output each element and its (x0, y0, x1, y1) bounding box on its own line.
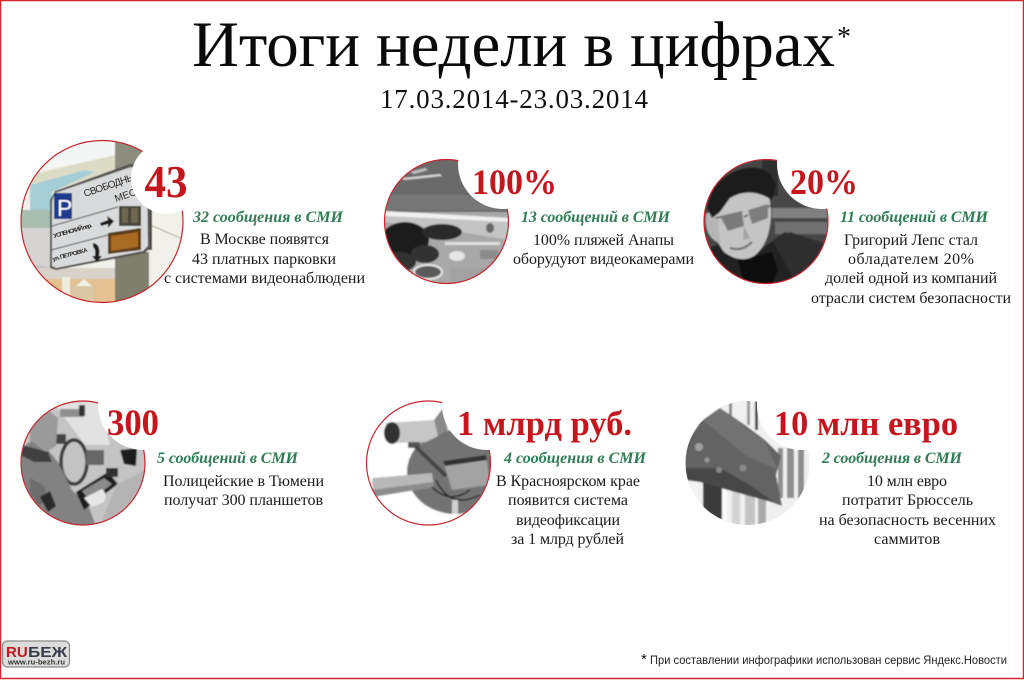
mentions count: 13 сообщений в СМИ (521, 209, 671, 226)
mentions count: 11 сообщений в СМИ (840, 209, 989, 226)
mentions count: 32 сообщения в СМИ (192, 209, 344, 226)
photo: parking sign (20, 140, 188, 308)
description: В Москве появятся (200, 231, 330, 248)
panel: Leps (703, 158, 1011, 306)
logo: БЕЖ (28, 644, 68, 661)
panel: tablets (20, 400, 324, 526)
number: 20% (790, 162, 858, 202)
number: 300 (107, 403, 159, 444)
description: 10 млн евро (867, 473, 947, 490)
title: Итоги недели в цифрах (192, 9, 835, 81)
description (513, 232, 694, 268)
description (163, 473, 324, 509)
notch behind number (442, 360, 532, 450)
logo: RU (6, 644, 28, 661)
description: на безопасность весенних (819, 512, 996, 529)
description: получат 300 планшетов (164, 492, 323, 509)
number: 100% (472, 162, 557, 202)
photo: police officer in car (20, 400, 150, 530)
description: обладателем 20% (848, 251, 974, 268)
notch behind number (131, 142, 203, 214)
mentions count: 2 сообщения в СМИ (821, 450, 963, 467)
number: 43 (144, 157, 188, 207)
description (164, 231, 365, 287)
description: отрасли систем безопасности (811, 290, 1011, 307)
photo: traffic camera (366, 400, 492, 526)
description (819, 473, 996, 548)
notch behind number (757, 360, 847, 450)
mentions count: 5 сообщений в СМИ (157, 450, 299, 467)
number: 10 млн евро (774, 404, 958, 443)
footnote: При составлении инфографики использован сервис Яндекс.Новости (650, 653, 1007, 667)
notch behind number (458, 119, 548, 209)
footnote: * (641, 651, 647, 668)
photo: parking sign: ул. ПЕТРОВКА (52, 248, 89, 263)
logo: www.ru-bezh.ru (7, 660, 65, 666)
logo (2, 641, 70, 667)
description: с системами видеонаблюдени (164, 270, 365, 287)
description: Полицейские в Тюмени (163, 473, 324, 490)
description: оборудуют видеокамерами (513, 251, 694, 268)
photo: beach aerial (384, 158, 510, 284)
photo: EU flag (685, 400, 811, 526)
notch behind number (777, 119, 867, 209)
description: саммитов (874, 531, 940, 548)
panel: Brussels (686, 401, 996, 544)
photo: parking sign: СВОБОДНЫЕ (82, 170, 143, 200)
photo: parking sign: МЕС (113, 187, 138, 205)
panel: video recording (366, 400, 646, 548)
description: 100% пляжей Анапы (533, 232, 674, 249)
description: долей одной из компаний (825, 270, 997, 287)
title: * (837, 22, 851, 53)
description: появится система (508, 492, 628, 509)
description: 43 платных парковки (192, 251, 336, 268)
date range subtitle: 17.03.2014-23.03.2014 (380, 84, 648, 114)
description: В Красноярском крае (496, 473, 640, 490)
photo: parking sign: P (57, 195, 72, 221)
photo: parking sign: УСПЕНСКИЙ пер. (52, 221, 93, 240)
photo: portrait (703, 158, 829, 284)
description: видеофиксации (516, 512, 620, 529)
panel: parking (20, 140, 365, 308)
notch behind number (98, 360, 188, 450)
number: 1 млрд руб. (457, 404, 632, 443)
panel: beaches (384, 158, 694, 284)
description (496, 473, 640, 548)
description: Григорий Лепс стал (844, 232, 978, 249)
description: потратит Брюссель (842, 492, 973, 509)
description: за 1 млрд рублей (511, 531, 624, 548)
description (811, 232, 1011, 307)
mentions count: 4 сообщения в СМИ (503, 450, 647, 467)
